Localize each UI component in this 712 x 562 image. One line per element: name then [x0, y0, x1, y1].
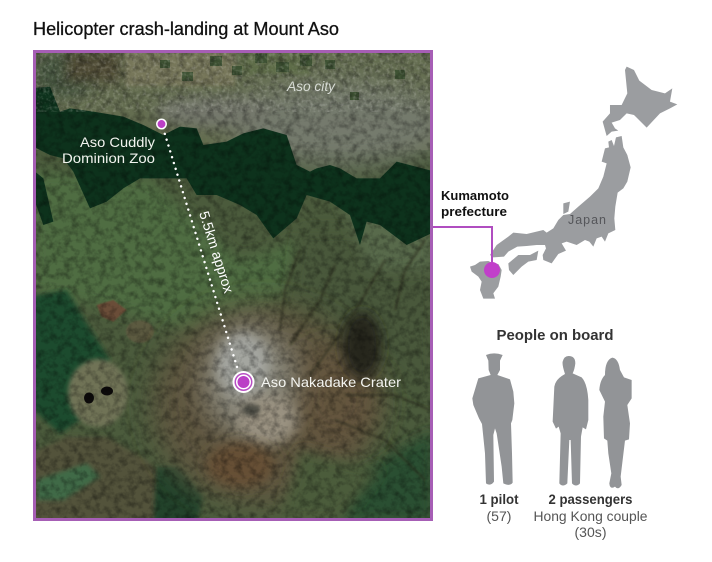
map area: small crater: [68, 359, 128, 427]
Noto peninsula: [563, 202, 570, 214]
map area: left forest: [30, 290, 203, 525]
caption: pilot: [480, 492, 519, 524]
callout: Kumamoto prefecture: Kumamoto: [441, 189, 509, 203]
icon: female passenger: [599, 358, 632, 488]
caption: passengers: (30s): [574, 525, 606, 540]
label: Aso Nakadake Crater: Aso Nakadake Crater: [261, 374, 401, 390]
marker: crater: [232, 371, 254, 393]
panel: satellite map: [30, 50, 450, 525]
label: distance: 5.5km approx: [196, 209, 237, 295]
icon: male passenger: [553, 356, 588, 485]
map of Japan: [470, 67, 677, 299]
map area: volcano massif: [152, 240, 433, 521]
map area: farmland and town: [33, 50, 450, 167]
caption: pilot: (57): [486, 509, 512, 524]
Shikoku: [508, 251, 538, 275]
caption: passengers: 2 passengers: [548, 492, 632, 507]
callout: Kumamoto prefecture: prefecture: [441, 205, 507, 219]
label: Aso Cuddly Dominion Zoo: Aso Cuddly: [80, 134, 155, 150]
Honshu: [490, 136, 631, 263]
label: Aso city: Aso city: [286, 79, 336, 94]
Hokkaido: [603, 67, 677, 136]
dotted route line: [163, 128, 238, 370]
caption: passengers: [534, 492, 648, 540]
Kyushu: [470, 261, 502, 299]
marker: zoo: [157, 119, 166, 129]
label: Aso Cuddly Dominion Zoo: Dominion Zoo: [62, 150, 155, 166]
heading: People on board: People on board: [496, 327, 614, 344]
icon: pilot: [472, 353, 514, 485]
caption: pilot: 1 pilot: [480, 492, 519, 507]
map texture: [33, 50, 433, 521]
title: Helicopter crash-landing at Mount Aso: [33, 19, 339, 39]
icons: people silhouettes: [472, 353, 632, 488]
callout: Kumamoto prefecture: [433, 189, 509, 278]
map area: dark forest belt: [30, 87, 435, 245]
map area: green plains: [36, 170, 430, 327]
label: Japan: Japan: [568, 213, 606, 227]
label: Aso Cuddly Dominion Zoo: [62, 134, 155, 166]
caption: passengers: Hong Kong couple: [534, 509, 648, 524]
